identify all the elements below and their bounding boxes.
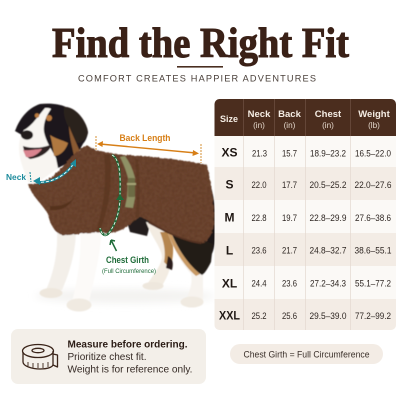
callout text: Measure before ordering. (68, 340, 188, 350)
harness strap (120, 156, 135, 208)
row XL: 27.2–34.3 (310, 278, 346, 288)
illustration: dog wearing brown coat (6, 104, 216, 312)
back length measurement: Back Length (120, 133, 170, 143)
floor shadow (35, 289, 215, 303)
row XS: XS (221, 146, 238, 160)
title underline (177, 66, 223, 68)
table header: Chest (315, 109, 342, 120)
row XXL (219, 308, 391, 322)
table header: (in) (322, 121, 334, 130)
row XS: 15.7 (282, 148, 297, 158)
row XXL: 25.6 (282, 311, 297, 321)
row XL: 24.4 (252, 278, 267, 288)
chest girth measurement (100, 155, 156, 275)
row XL (222, 276, 391, 290)
back length measurement (96, 133, 201, 163)
callout text (68, 340, 192, 376)
row M: 27.6–38.6 (355, 213, 391, 223)
row L (226, 244, 392, 258)
panel: size chart table (214, 99, 396, 330)
row XXL: 25.2 (252, 311, 267, 321)
row S: S (225, 178, 234, 192)
row M (224, 210, 391, 224)
subtitle: COMFORT CREATES HAPPIER ADVENTURES (78, 74, 316, 84)
table header: (in) (253, 121, 265, 130)
icon: tape measure (22, 344, 58, 369)
table header: (lb) (368, 121, 380, 130)
row L: 23.6 (252, 246, 267, 256)
front legs (40, 226, 102, 312)
tan cheek (50, 135, 68, 156)
row XS (221, 146, 391, 160)
callout: chest girth note: Chest Girth = Full Circumference (244, 350, 370, 360)
row S (225, 178, 392, 192)
panel: measure before ordering (11, 329, 206, 384)
row S: 20.5–25.2 (310, 180, 347, 190)
row XXL: 77.2–99.2 (355, 311, 391, 321)
white blaze, muzzle and chest (19, 108, 58, 184)
row L: 38.6–55.1 (354, 246, 392, 256)
row XXL: XXL (219, 308, 240, 322)
neck measurement: Neck (6, 172, 26, 182)
row S: 22.0–27.6 (354, 180, 392, 190)
row XS: 21.3 (252, 148, 267, 158)
row M: 19.7 (282, 213, 297, 223)
table header: Size (220, 114, 238, 124)
black skull (15, 104, 88, 170)
row L: 24.8–32.7 (310, 246, 347, 256)
callout: chest girth note (230, 344, 383, 364)
chest girth measurement: (Full Circumference) (102, 268, 156, 275)
chest girth measurement: Chest Girth (106, 255, 149, 265)
table header (214, 99, 396, 136)
callout text: Prioritize chest fit. (68, 352, 146, 363)
row L: L (226, 244, 233, 258)
row S: 17.7 (282, 180, 297, 190)
table header: Weight (358, 109, 391, 120)
table body background (214, 99, 396, 330)
row XL: 55.1–77.2 (355, 278, 391, 288)
dog head (15, 104, 88, 184)
far rear leg (142, 222, 173, 290)
row XXL: 29.5–39.0 (310, 311, 347, 321)
dark underbelly (125, 215, 152, 236)
row S: 22.0 (252, 180, 267, 190)
row M: 22.8–29.9 (310, 213, 347, 223)
tan eyebrow markings (35, 113, 39, 118)
callout text: Weight is for reference only. (68, 364, 192, 376)
shaded rows (214, 167, 396, 200)
coat folds (50, 198, 74, 210)
right ear (64, 107, 88, 143)
row XL: XL (222, 276, 237, 290)
row M: M (224, 210, 234, 224)
near rear leg (166, 228, 213, 308)
table header: (in) (284, 121, 296, 130)
neck measurement (6, 159, 76, 185)
mouth and tongue (23, 144, 52, 159)
row XL: 23.6 (282, 278, 297, 288)
table header: Neck (248, 109, 271, 120)
row M: 22.8 (252, 213, 267, 223)
table header: Back (278, 109, 302, 120)
dog tail (198, 178, 216, 258)
brown coat (28, 145, 214, 244)
row XS: 18.9–23.2 (310, 148, 346, 158)
row L: 21.7 (282, 246, 297, 256)
row XS: 16.5–22.0 (355, 148, 391, 158)
title: Find the Right Fit (52, 21, 349, 67)
nose (21, 130, 33, 140)
